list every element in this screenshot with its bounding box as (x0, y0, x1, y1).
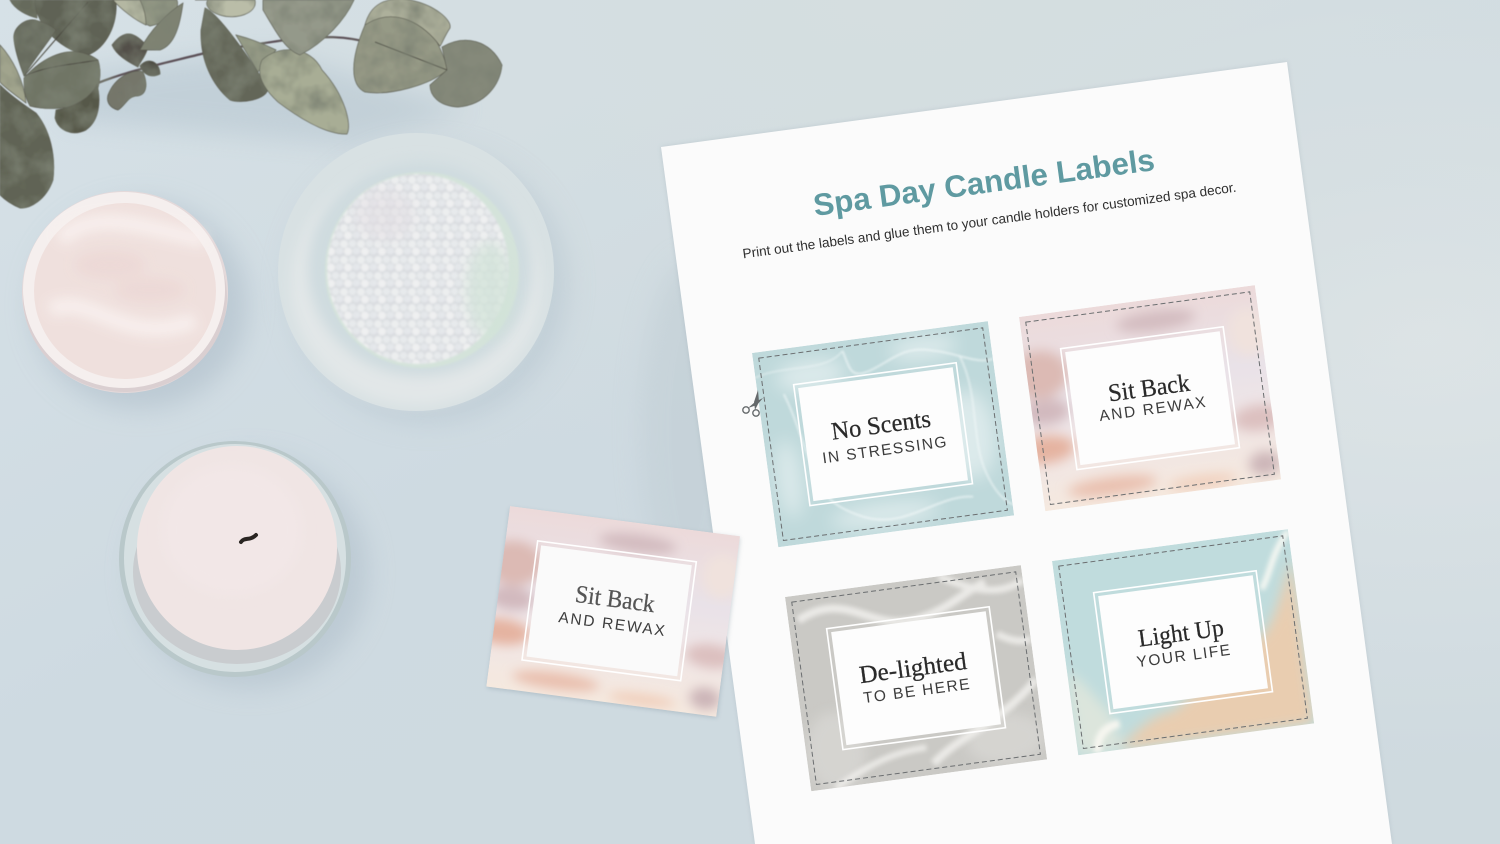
icon: eucalyptus branch (0, 0, 502, 208)
label: De-lighted sand (785, 565, 1050, 795)
label title: De-lighted (858, 648, 969, 689)
label: Sit Back sky (1019, 285, 1281, 511)
bath salts (325, 172, 519, 368)
label: No Scents water (752, 321, 1014, 547)
jar lid: pink marble (22, 191, 248, 409)
label title: No Scents (830, 405, 932, 446)
glass bowl with bath salts (278, 133, 568, 423)
label: Light Up beach (1052, 529, 1314, 755)
label title: Sit Back (1107, 370, 1192, 407)
label title: Sit Back (574, 581, 657, 618)
label title: Light Up (1137, 614, 1225, 653)
label subtitle: YOUR LIFE (1136, 642, 1231, 671)
label subtitle: AND REWAX (1098, 394, 1207, 425)
label subtitle: AND REWAX (557, 609, 666, 640)
instructions: Print out the labels and glue them to your candle holders for customized spa decor. (742, 180, 1237, 261)
printed sheet (661, 62, 1392, 844)
label subtitle: IN STRESSING (821, 434, 947, 467)
icon: wick (241, 535, 256, 542)
candle in glass holder (119, 441, 368, 688)
heading: Spa Day Candle Labels (811, 142, 1157, 223)
label subtitle: TO BE HERE (862, 676, 971, 707)
icon: scissors (743, 390, 763, 416)
loose cut-out label (486, 506, 742, 719)
